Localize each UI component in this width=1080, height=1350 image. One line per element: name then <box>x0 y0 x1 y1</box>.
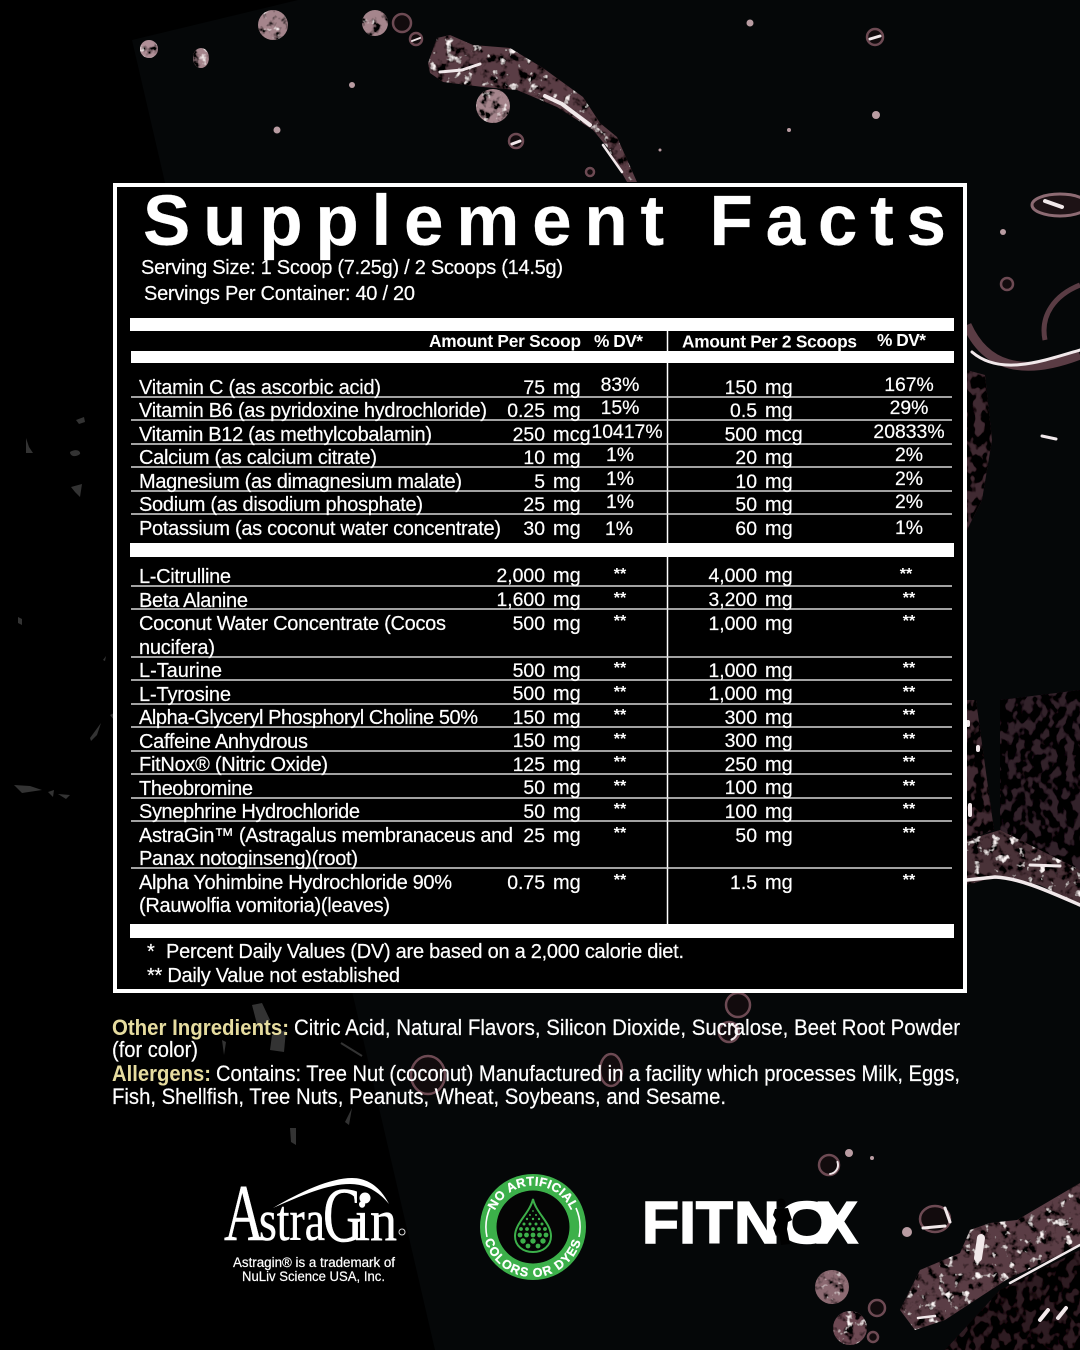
footnotes: * <box>147 941 155 963</box>
row: Magnesium: 1% <box>606 468 634 490</box>
row: Sodium: 50 <box>735 494 757 516</box>
row: Potassium: 30 <box>523 518 545 540</box>
row: Alpha-Glyceryl Phosphoryl Choline: 150 <box>513 707 545 729</box>
row: L-Citrulline <box>139 565 913 588</box>
row: Beta Alanine: ** <box>614 590 627 607</box>
row: L-Citrulline: 4,000 <box>708 565 757 587</box>
water splash: right side <box>967 194 1080 905</box>
row: Coconut Water Concentrate: ** <box>903 613 916 630</box>
row: Synephrine Hydrochloride: 50 <box>523 801 545 823</box>
other ingredients and allergens <box>112 1015 960 1109</box>
row: Caffeine Anhydrous: mg <box>553 730 581 752</box>
water splash: bottom right <box>815 1149 1080 1350</box>
row: AstraGin: mg <box>553 825 581 847</box>
row: L-Taurine: ** <box>614 660 627 677</box>
row: L-Tyrosine: mg <box>765 683 793 705</box>
row: FitNox: 250 <box>725 754 757 776</box>
row: Coconut Water Concentrate: 500 <box>513 613 545 635</box>
row: L-Tyrosine: 1,000 <box>708 683 757 705</box>
row: Vitamin B6 <box>139 397 928 422</box>
column headers: Amount Per 2 Scoops <box>682 332 857 352</box>
row: Vitamin B12: mcg <box>765 424 803 446</box>
row: Sodium: 25 <box>523 494 545 516</box>
row: FitNox: ** <box>614 754 627 771</box>
row: L-Citrulline: ** <box>614 566 627 583</box>
row: Sodium <box>139 491 923 516</box>
row: Sodium: mg <box>765 494 793 516</box>
row: Potassium: mg <box>553 518 581 540</box>
row: L-Tyrosine <box>139 683 916 706</box>
row: Caffeine Anhydrous: Caffeine Anhydrous <box>139 731 308 753</box>
logo: AstraGin: NuLiv Science USA, Inc. <box>242 1269 385 1284</box>
row: Caffeine Anhydrous: 150 <box>513 730 545 752</box>
row: FitNox: mg <box>553 754 581 776</box>
row: Synephrine Hydrochloride: ** <box>903 801 916 818</box>
row: Vitamin B12: 10417% <box>591 421 663 443</box>
row: Vitamin B6: 15% <box>601 397 639 419</box>
row: Theobromine: mg <box>553 777 581 799</box>
row: Vitamin C: 83% <box>601 374 639 396</box>
row: Synephrine Hydrochloride: 100 <box>725 801 757 823</box>
row: Coconut Water Concentrate <box>139 613 916 659</box>
row: L-Citrulline: mg <box>765 565 793 587</box>
row: Alpha-Glyceryl Phosphoryl Choline <box>139 707 916 729</box>
row: Magnesium: mg <box>765 471 793 493</box>
row: L-Taurine: L-Taurine <box>139 660 222 682</box>
row: L-Taurine: 1,000 <box>708 660 757 682</box>
row: L-Citrulline: L-Citrulline <box>139 566 231 588</box>
row: Vitamin B6: 0.5 <box>730 400 757 422</box>
other ingredients and allergens: (for color) <box>112 1037 198 1062</box>
row: Alpha Yohimbine: 1.5 <box>730 872 757 894</box>
row: Vitamin B6: 29% <box>890 397 928 419</box>
row: Vitamin B6: mg <box>765 400 793 422</box>
row: Calcium <box>139 444 923 469</box>
row: Coconut Water Concentrate: ** <box>614 613 627 630</box>
row: Alpha Yohimbine: 0.75 <box>507 872 545 894</box>
logo: FitNox <box>642 1190 858 1256</box>
row: AstraGin <box>139 825 916 870</box>
serving info: Serving Size: 1 Scoop (7.25g) / 2 Scoops (14.5g) <box>141 257 563 279</box>
table bars and rules <box>130 318 954 938</box>
row: Caffeine Anhydrous <box>139 730 916 753</box>
other ingredients and allergens: Other Ingredients: <box>112 1015 289 1040</box>
row: Coconut Water Concentrate: 1,000 <box>708 613 757 635</box>
column headers <box>429 330 926 352</box>
row: L-Taurine: mg <box>553 660 581 682</box>
footnotes: Percent Daily Values (DV) are based on a 2,000 calorie diet. <box>166 941 684 963</box>
logo: AstraGin: in <box>355 1188 397 1253</box>
row: Synephrine Hydrochloride: mg <box>553 801 581 823</box>
water droplets: top <box>140 10 883 176</box>
row: Alpha-Glyceryl Phosphoryl Choline: ** <box>614 707 627 724</box>
row: Calcium: mg <box>765 447 793 469</box>
row: Calcium: mg <box>553 447 581 469</box>
water droplets: behind ingredients <box>222 993 750 1145</box>
row: Beta Alanine: 1,600 <box>496 589 545 611</box>
row: Vitamin B12: 250 <box>513 424 545 446</box>
water splash: top centre <box>428 35 637 182</box>
row: L-Citrulline: ** <box>900 566 913 583</box>
row: Potassium: mg <box>765 518 793 540</box>
title: Supplement Facts <box>143 182 946 261</box>
row: Alpha-Glyceryl Phosphoryl Choline: 300 <box>725 707 757 729</box>
row: Vitamin C: 75 <box>523 377 545 399</box>
row: AstraGin: mg <box>765 825 793 847</box>
row: Theobromine <box>139 777 916 800</box>
row: Magnesium: 10 <box>735 471 757 493</box>
row: Potassium: Potassium (as coconut water concentrate) <box>139 518 501 540</box>
logo: FitNox: X <box>817 1190 858 1256</box>
row: Calcium: 20 <box>735 447 757 469</box>
logo: FitNox: FIT <box>642 1190 733 1256</box>
row: Vitamin C: 167% <box>884 374 934 396</box>
row: Calcium: 2% <box>895 444 923 466</box>
row: L-Taurine <box>139 660 916 682</box>
row: Magnesium: mg <box>553 471 581 493</box>
row: Alpha-Glyceryl Phosphoryl Choline: Alpha-Glyceryl Phosphoryl Choline 50% <box>139 707 478 729</box>
other ingredients and allergens: Allergens: <box>112 1061 211 1086</box>
row: Synephrine Hydrochloride <box>139 801 916 823</box>
row: Coconut Water Concentrate: nucifera) <box>139 637 215 659</box>
row: Potassium: 1% <box>895 517 923 539</box>
row: Alpha Yohimbine: Alpha Yohimbine Hydrochloride 90% <box>139 872 452 894</box>
row: FitNox: ** <box>903 754 916 771</box>
row: Theobromine: mg <box>765 777 793 799</box>
row: Alpha-Glyceryl Phosphoryl Choline: ** <box>903 707 916 724</box>
row: Calcium: 1% <box>606 444 634 466</box>
logo: AstraGin: A <box>224 1170 264 1258</box>
icon: no artificial colors badge <box>480 1174 586 1280</box>
row: Caffeine Anhydrous: 300 <box>725 730 757 752</box>
row: AstraGin: ** <box>614 825 627 842</box>
row: Alpha Yohimbine: ** <box>614 872 627 889</box>
logo: AstraGin: Astragin® is a trademark of <box>233 1255 395 1270</box>
row: Coconut Water Concentrate: mg <box>553 613 581 635</box>
row: Vitamin B6: 0.25 <box>507 400 545 422</box>
row: Sodium: 2% <box>895 491 923 513</box>
row: L-Taurine: 500 <box>513 660 545 682</box>
row: Alpha Yohimbine: ** <box>903 872 916 889</box>
panel: supplement facts <box>115 182 965 991</box>
row: Alpha Yohimbine: mg <box>765 872 793 894</box>
other ingredients and allergens: Fish, Shellfish, Tree Nuts, Peanuts, Wheat, Soybeans, and Sesame. <box>112 1084 726 1109</box>
row: Theobromine: ** <box>903 778 916 795</box>
row: Vitamin B6: mg <box>553 400 581 422</box>
row: Magnesium: 2% <box>895 468 923 490</box>
row: Theobromine: 100 <box>725 777 757 799</box>
row: Vitamin C: Vitamin C (as ascorbic acid) <box>139 377 381 399</box>
logo: FitNox: O <box>777 1190 837 1256</box>
row: FitNox <box>139 754 916 776</box>
row: Coconut Water Concentrate: Coconut Water Concentrate (Cocos <box>139 613 446 635</box>
row: L-Taurine: ** <box>903 660 916 677</box>
row: Alpha Yohimbine <box>139 872 916 917</box>
row: L-Tyrosine: mg <box>553 683 581 705</box>
row: Theobromine: Theobromine <box>139 778 253 800</box>
row: Magnesium <box>139 468 923 493</box>
row: FitNox: mg <box>765 754 793 776</box>
row: Synephrine Hydrochloride: Synephrine Hydrochloride <box>139 801 360 823</box>
row: Vitamin B12: 20833% <box>873 421 945 443</box>
row: Magnesium: Magnesium (as dimagnesium malate) <box>139 471 462 493</box>
row: Theobromine: 50 <box>523 777 545 799</box>
row: AstraGin: 25 <box>523 825 545 847</box>
footnotes <box>147 941 684 987</box>
row: Beta Alanine <box>139 589 916 612</box>
row: Vitamin B12: mcg <box>553 424 591 446</box>
serving info <box>141 257 563 305</box>
row: FitNox: FitNox® (Nitric Oxide) <box>139 754 328 776</box>
footnotes: ** Daily Value not established <box>147 965 400 987</box>
logo: FitNox: N <box>734 1190 780 1256</box>
row: AstraGin: 50 <box>735 825 757 847</box>
row: Beta Alanine: 3,200 <box>708 589 757 611</box>
row: L-Tyrosine: 500 <box>513 683 545 705</box>
icon: no artificial colors badge: NO ARTIFICIAL <box>487 1176 576 1210</box>
logo: AstraGin: stra <box>259 1188 325 1253</box>
row: AstraGin: AstraGin™ (Astragalus membranaceus and <box>139 825 513 847</box>
other ingredients and allergens: Contains: Tree Nut (coconut) Manufactured in a facility which processes Milk, Eggs, <box>216 1061 960 1086</box>
logo: AstraGin <box>224 1170 405 1284</box>
column headers: % DV* <box>877 330 926 350</box>
row: AstraGin: Panax notoginseng)(root) <box>139 848 358 870</box>
row: Sodium: 1% <box>606 491 634 513</box>
other ingredients and allergens: Citric Acid, Natural Flavors, Silicon Dioxide, Sucralose, Beet Root Powder <box>294 1015 960 1040</box>
column headers: Amount Per Scoop <box>429 331 581 351</box>
row: Vitamin C: 150 <box>725 377 757 399</box>
row: AstraGin: ** <box>903 825 916 842</box>
row: Synephrine Hydrochloride: mg <box>765 801 793 823</box>
row: Sodium: Sodium (as disodium phosphate) <box>139 494 423 516</box>
row: Potassium: 1% <box>605 518 633 540</box>
row: Alpha Yohimbine: mg <box>553 872 581 894</box>
row: Beta Alanine: ** <box>903 590 916 607</box>
row: Vitamin B12 <box>139 421 945 446</box>
row: Vitamin C: mg <box>553 377 581 399</box>
row: Vitamin B12: 500 <box>725 424 757 446</box>
icon: no artificial colors badge: COLORS OR DYES <box>486 1238 580 1277</box>
serving info: Servings Per Container: 40 / 20 <box>144 283 415 305</box>
row: Calcium: 10 <box>523 447 545 469</box>
row: Caffeine Anhydrous: ** <box>903 731 916 748</box>
row: L-Citrulline: mg <box>553 565 581 587</box>
row: Synephrine Hydrochloride: ** <box>614 801 627 818</box>
row: Alpha Yohimbine: (Rauwolfia vomitoria)(leaves) <box>139 895 390 917</box>
row: Magnesium: 5 <box>534 471 545 493</box>
row: Beta Alanine: mg <box>765 589 793 611</box>
row: Alpha-Glyceryl Phosphoryl Choline: mg <box>765 707 793 729</box>
row: FitNox: 125 <box>513 754 545 776</box>
row: Calcium: Calcium (as calcium citrate) <box>139 447 377 469</box>
row: Vitamin C <box>139 374 934 399</box>
row: Theobromine: ** <box>614 778 627 795</box>
row: Beta Alanine: mg <box>553 589 581 611</box>
row: Caffeine Anhydrous: ** <box>614 731 627 748</box>
row: Vitamin B12: Vitamin B12 (as methylcobalamin) <box>139 424 432 446</box>
row: L-Citrulline: 2,000 <box>496 565 545 587</box>
row: Potassium <box>139 517 923 540</box>
row: L-Tyrosine: L-Tyrosine <box>139 684 231 706</box>
logo: AstraGin: G <box>323 1171 363 1258</box>
row: Caffeine Anhydrous: mg <box>765 730 793 752</box>
row: Vitamin B6: Vitamin B6 (as pyridoxine hydrochloride) <box>139 400 487 422</box>
grey speckles: left side <box>14 417 115 799</box>
row: L-Tyrosine: ** <box>903 684 916 701</box>
row: Potassium: 60 <box>735 518 757 540</box>
row: Alpha-Glyceryl Phosphoryl Choline: mg <box>553 707 581 729</box>
row: Vitamin C: mg <box>765 377 793 399</box>
row: L-Tyrosine: ** <box>614 684 627 701</box>
column headers: % DV* <box>594 331 643 351</box>
row: Sodium: mg <box>553 494 581 516</box>
row: L-Taurine: mg <box>765 660 793 682</box>
row: Coconut Water Concentrate: mg <box>765 613 793 635</box>
row: Beta Alanine: Beta Alanine <box>139 590 248 612</box>
